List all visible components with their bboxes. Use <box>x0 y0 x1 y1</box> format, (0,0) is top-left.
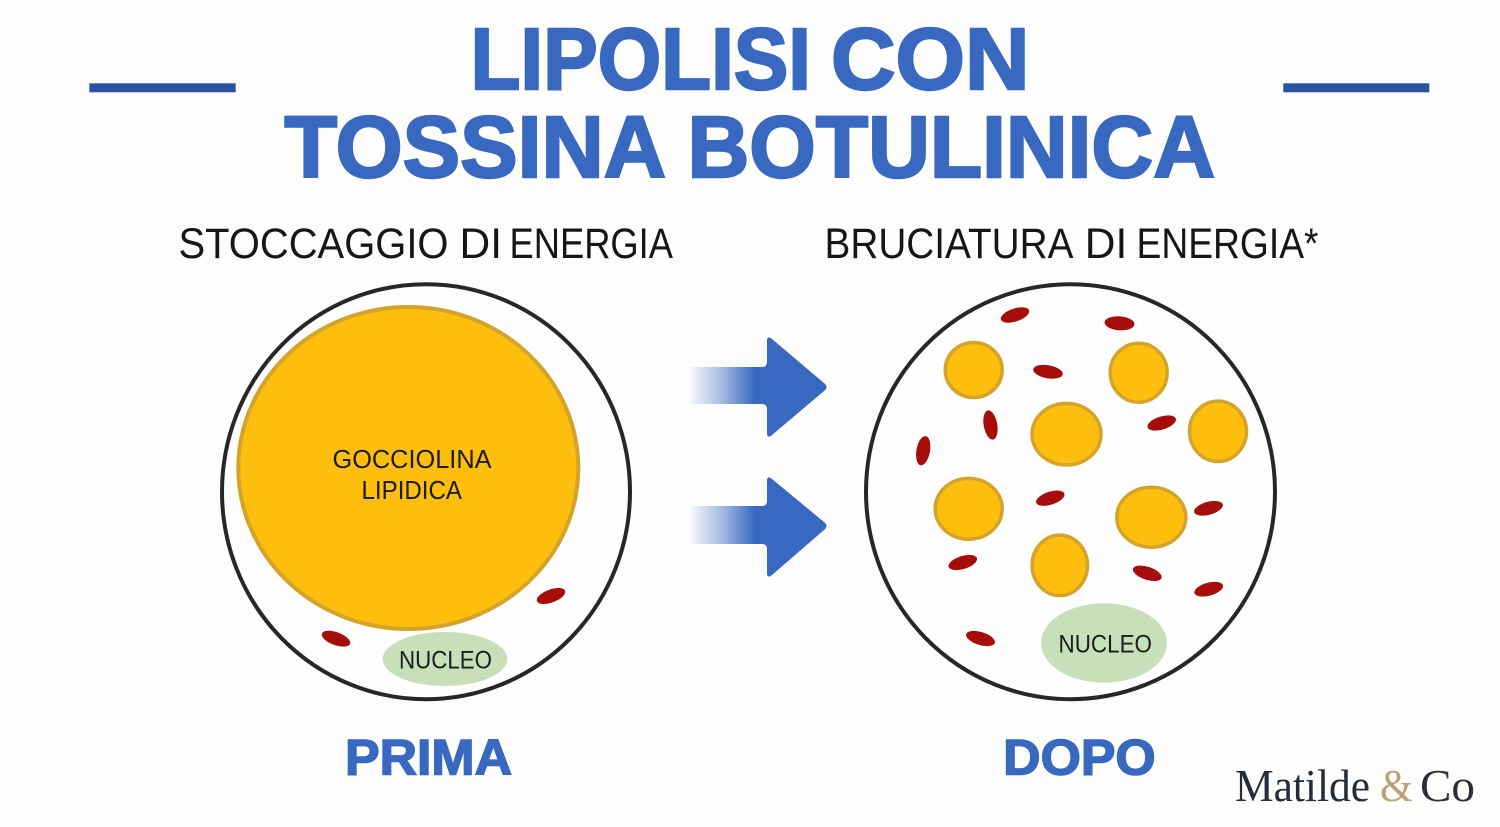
heading: energy storage: ENERGIA <box>510 220 673 268</box>
nucleus <box>383 632 507 686</box>
heading: energy storage: STOCCAGGIO <box>178 220 448 268</box>
label: before: PRIMA <box>345 730 512 786</box>
small lipid droplets <box>935 342 1246 596</box>
cell membrane <box>866 284 1275 699</box>
panel: after cell <box>866 284 1275 699</box>
mitochondria <box>320 585 567 650</box>
lipid droplet: LIPIDICA <box>362 475 463 505</box>
panel: before cell <box>222 284 630 699</box>
cell membrane <box>222 284 630 699</box>
logo: Matilde & Co: Co <box>1420 760 1475 811</box>
lipid droplet: GOCCIOLINA <box>332 444 492 474</box>
heading: energy burning: ENERGIA* <box>1136 220 1319 268</box>
mitochondria <box>914 304 1225 649</box>
logo: Matilde & Co: & <box>1380 760 1413 811</box>
title: BOTULINICA <box>688 99 1215 196</box>
heading: energy burning: BRUCIATURA <box>824 220 1074 268</box>
title: CON <box>831 11 1030 108</box>
lipid droplet <box>238 307 578 629</box>
arrow: top <box>690 337 826 437</box>
arrow: bottom <box>690 477 826 577</box>
nucleus: NUCLEO <box>399 646 492 674</box>
heading: energy burning: DI <box>1085 220 1127 268</box>
heading: energy burning <box>824 220 1319 268</box>
title rule left <box>89 83 236 92</box>
title rule right <box>1283 83 1429 92</box>
label: after: DOPO <box>1003 730 1156 786</box>
nucleus: NUCLEO <box>1058 630 1152 658</box>
title <box>284 11 1215 196</box>
logo: Matilde & Co <box>1235 760 1475 811</box>
nucleus <box>1041 603 1167 683</box>
title: LIPOLISI <box>470 11 811 108</box>
logo: Matilde & Co: Matilde <box>1235 760 1370 811</box>
heading: energy storage <box>178 220 673 268</box>
heading: energy storage: DI <box>460 220 502 268</box>
title: TOSSINA <box>284 99 666 196</box>
